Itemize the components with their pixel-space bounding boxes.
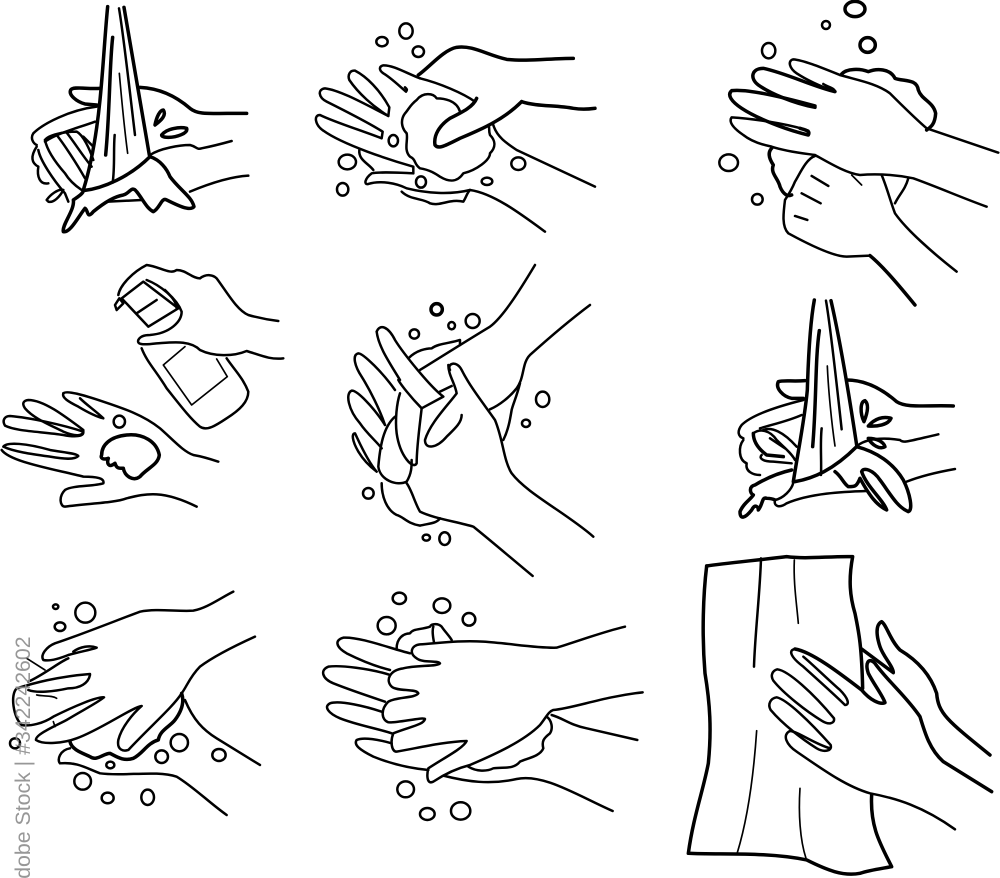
hand pressing pump bbox=[118, 265, 283, 359]
soap bubbles bbox=[10, 603, 226, 805]
water splash bbox=[63, 110, 194, 232]
lower hand fingers bbox=[323, 638, 637, 811]
upper hand bbox=[383, 627, 643, 782]
hands bbox=[32, 87, 248, 202]
panel: rub back of hand bbox=[719, 1, 998, 305]
foam bbox=[359, 94, 494, 204]
foam bbox=[397, 624, 552, 771]
soap bubbles bbox=[378, 593, 475, 820]
upper hand bbox=[13, 592, 255, 751]
soap bubbles bbox=[337, 23, 525, 196]
upper hand bbox=[730, 59, 998, 207]
paper towel bbox=[688, 557, 892, 874]
water splash bbox=[740, 401, 911, 517]
panel: rinse with splashing water bbox=[739, 300, 955, 517]
soap bubbles bbox=[719, 1, 875, 205]
panel: rinse hands under running water bbox=[32, 7, 248, 232]
foam bbox=[769, 69, 936, 196]
foam bbox=[382, 340, 520, 526]
water stream bbox=[83, 7, 149, 190]
open palm bbox=[316, 65, 595, 232]
water stream bbox=[793, 300, 857, 482]
panel: interlace fingers bbox=[348, 265, 593, 576]
panel: dry hands with towel bbox=[688, 557, 992, 874]
panel: rub palm to back of hand bbox=[323, 593, 643, 820]
panel: dispense soap from pump bottle bbox=[2, 265, 283, 507]
hands bbox=[739, 380, 955, 506]
lower hand bbox=[59, 700, 260, 815]
panel: lather palm with soap bbox=[316, 23, 595, 232]
drying hands bbox=[769, 622, 992, 829]
panel: scrub over back of fingers bbox=[10, 592, 260, 815]
lower hand bbox=[784, 156, 957, 305]
foam bbox=[70, 693, 183, 759]
rubbing hand bbox=[418, 47, 595, 147]
pump bottle bbox=[115, 282, 248, 428]
soap bubbles bbox=[363, 304, 549, 545]
arms and hands bbox=[348, 265, 593, 576]
open hand with soap bbox=[2, 392, 218, 507]
